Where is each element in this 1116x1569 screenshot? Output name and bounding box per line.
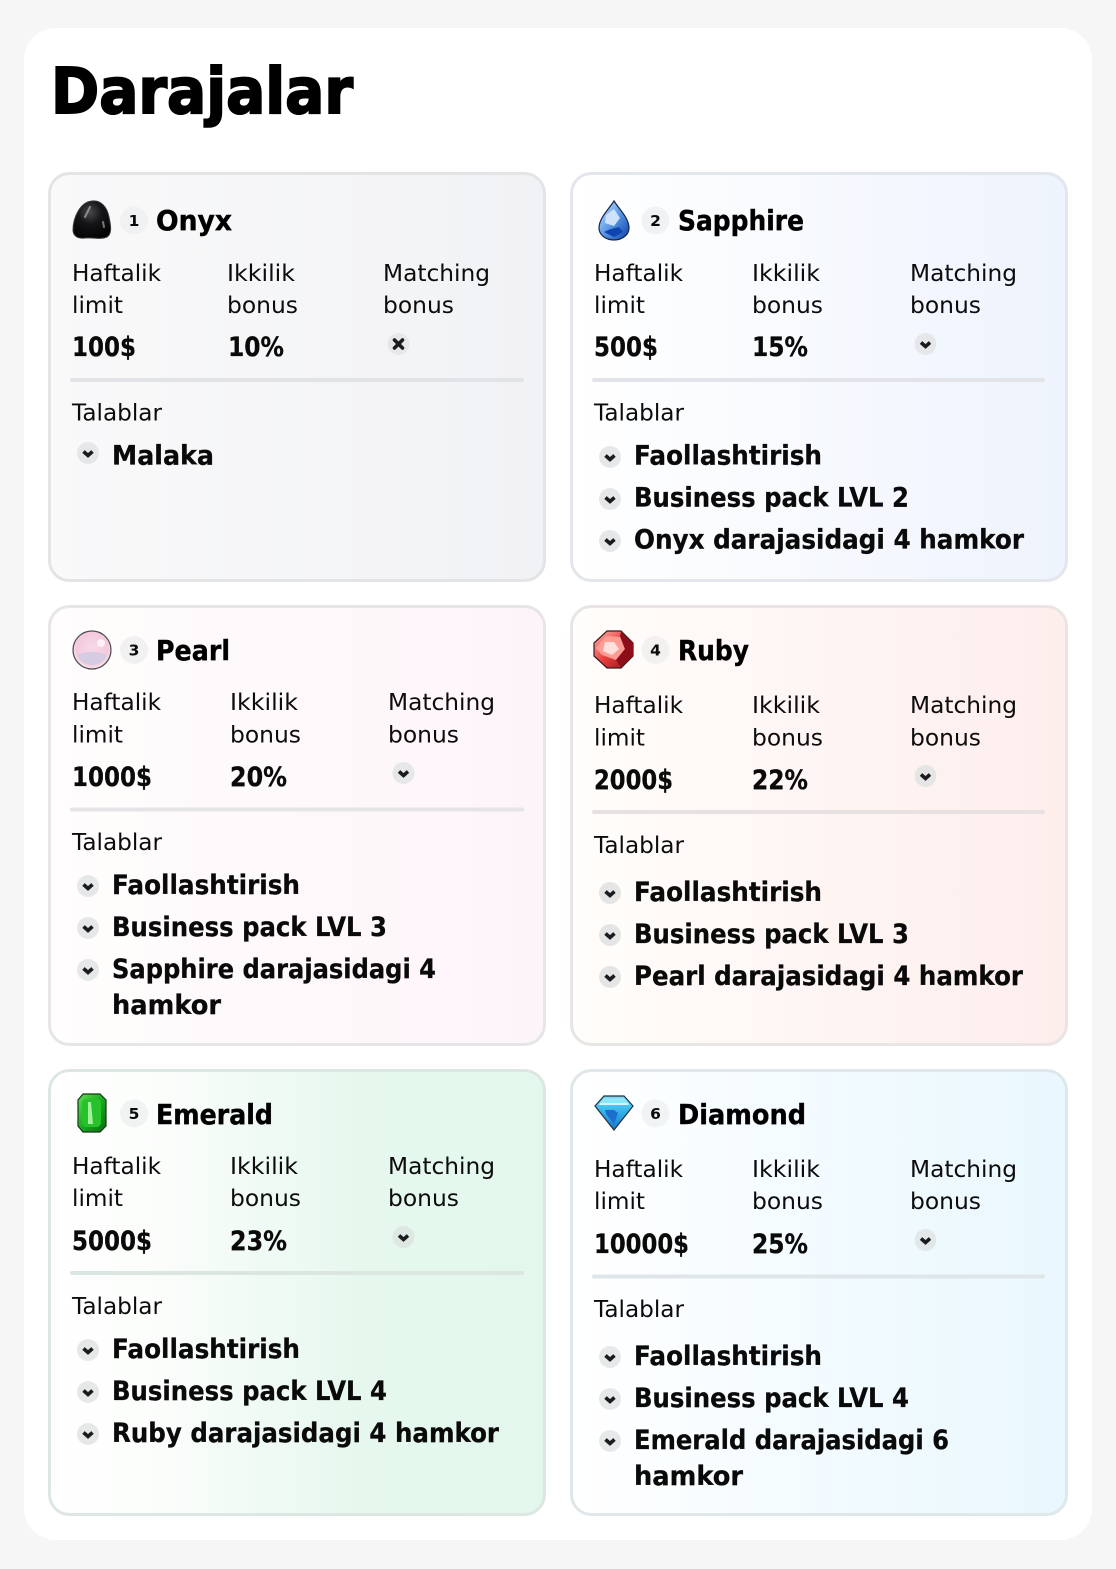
stat: binary bonus (227, 259, 298, 363)
stat: weekly limit: Haftalik (72, 259, 161, 287)
stat: weekly limit: 1000$ (72, 762, 152, 793)
stat: matching bonus: bonus (388, 1184, 459, 1212)
stat: binary bonus (752, 691, 823, 796)
stat: weekly limit (72, 1152, 161, 1257)
stat: binary bonus: Ikkilik (752, 691, 820, 719)
stat: weekly limit: 5000$ (72, 1226, 152, 1257)
requirements: Faollashtirish (634, 877, 822, 908)
icon: onyx gem (73, 201, 111, 238)
stat: binary bonus: 20% (230, 762, 287, 793)
requirements (593, 1295, 949, 1492)
panel: Diamond (572, 1070, 1066, 1514)
rank badge 4: 4 (650, 642, 661, 660)
requirements: Business pack LVL 4 (634, 1383, 909, 1414)
stat: matching bonus (388, 1152, 495, 1248)
stat: matching bonus: bonus (388, 720, 459, 748)
rank badge 2 (642, 206, 670, 234)
rank badge 1 (120, 206, 148, 234)
stat: binary bonus: 10% (228, 332, 284, 363)
stat: matching bonus: bonus (910, 1187, 981, 1215)
rank badge 6: 6 (650, 1105, 661, 1123)
stat: matching bonus: Matching (388, 1152, 495, 1180)
stat: weekly limit: 2000$ (594, 765, 673, 796)
requirements: Business pack LVL 4 (112, 1376, 387, 1407)
stat: matching bonus: Matching (910, 259, 1017, 287)
requirements: Talablar (593, 398, 684, 426)
stat: weekly limit (72, 688, 161, 793)
rank badge 5 (120, 1100, 148, 1128)
name: Emerald: Emerald (156, 1099, 273, 1131)
panel: Onyx (50, 174, 544, 580)
name: Diamond: Diamond (678, 1099, 806, 1131)
stat: matching bonus: Matching (910, 691, 1017, 719)
requirements (71, 398, 214, 472)
requirements: Emerald darajasidagi 6 (634, 1425, 949, 1456)
stat: weekly limit (594, 691, 683, 796)
icon: pearl gem (73, 631, 111, 669)
requirements: hamkor (112, 990, 222, 1021)
stat: weekly limit: Haftalik (72, 688, 161, 716)
requirements: Talablar (71, 828, 162, 856)
stat: weekly limit: limit (72, 720, 123, 748)
requirements: Onyx darajasidagi 4 hamkor (634, 524, 1025, 556)
stat: binary bonus: bonus (230, 720, 301, 748)
requirements: Business pack LVL 3 (112, 912, 387, 943)
stat: binary bonus: bonus (227, 291, 298, 319)
stat: binary bonus: 23% (230, 1226, 287, 1257)
stat: matching bonus: Matching (388, 688, 495, 716)
stat: binary bonus: Ikkilik (230, 1152, 298, 1180)
stat: binary bonus: Ikkilik (230, 688, 298, 716)
stat: matching bonus (910, 691, 1017, 787)
requirements: Faollashtirish (634, 440, 822, 472)
stat: weekly limit: 500$ (594, 332, 658, 363)
stat: binary bonus: bonus (752, 724, 823, 752)
stat: matching bonus: bonus (910, 291, 981, 319)
stat: binary bonus: Ikkilik (752, 1155, 820, 1183)
requirements: Faollashtirish (634, 1341, 822, 1372)
requirements: hamkor (634, 1461, 744, 1492)
requirements: Pearl darajasidagi 4 hamkor (634, 961, 1024, 992)
stat: weekly limit: limit (594, 724, 645, 752)
stat: binary bonus (752, 1155, 823, 1260)
rank badge 3 (120, 636, 148, 664)
stat: weekly limit: limit (594, 291, 645, 319)
stat: matching bonus (388, 688, 495, 784)
requirements: Talablar (71, 1292, 162, 1320)
stat: weekly limit: 10000$ (594, 1229, 689, 1260)
stat: matching bonus: Matching (383, 259, 490, 287)
panel: Pearl (50, 606, 544, 1044)
rank badge 6 (642, 1100, 670, 1128)
requirements: Ruby darajasidagi 4 hamkor (112, 1418, 500, 1449)
stat: weekly limit: Haftalik (72, 1152, 161, 1180)
stat: binary bonus: bonus (752, 1187, 823, 1215)
stat: matching bonus: bonus (383, 291, 454, 319)
stat: matching bonus: bonus (910, 724, 981, 752)
name: Onyx: Onyx (156, 205, 232, 237)
requirements: Business pack LVL 3 (634, 919, 909, 950)
requirements: Faollashtirish (112, 870, 300, 901)
icon: ruby gem (594, 631, 633, 668)
stat: matching bonus (910, 1155, 1017, 1251)
name: Pearl: Pearl (156, 635, 230, 667)
stat: weekly limit: Haftalik (594, 1155, 683, 1183)
requirements: Talablar (71, 398, 162, 426)
panel: Ruby (572, 606, 1066, 1044)
stat: weekly limit: Haftalik (594, 691, 683, 719)
stat: binary bonus: 15% (752, 332, 808, 363)
stat: weekly limit (72, 259, 161, 363)
rank badge 1: 1 (129, 212, 139, 230)
requirements (71, 828, 436, 1021)
stat: binary bonus: Ikkilik (752, 259, 820, 287)
stat: weekly limit (594, 259, 683, 363)
stat: binary bonus (752, 259, 823, 363)
stat: weekly limit: limit (72, 291, 123, 319)
requirements (593, 398, 1025, 556)
requirements: Business pack LVL 2 (634, 482, 909, 514)
requirements (593, 831, 1024, 992)
name: Ruby: Ruby (678, 635, 749, 667)
requirements: Talablar (593, 831, 684, 859)
stat: matching bonus (383, 259, 490, 355)
requirements (71, 1292, 500, 1449)
panel: Sapphire (572, 174, 1066, 580)
rank badge 3: 3 (129, 642, 139, 660)
stat: binary bonus (230, 1152, 301, 1257)
panel: Emerald (50, 1070, 544, 1514)
stat: binary bonus: 22% (752, 765, 808, 796)
requirements: Sapphire darajasidagi 4 (112, 954, 436, 985)
requirements: Talablar (593, 1295, 684, 1323)
stat: weekly limit: Haftalik (594, 259, 683, 287)
stat: binary bonus (230, 688, 301, 793)
rank badge 4 (642, 636, 670, 664)
name: Sapphire: Sapphire (678, 205, 804, 237)
stat: binary bonus: bonus (230, 1184, 301, 1212)
icon: diamond gem (595, 1096, 633, 1130)
stat: weekly limit: limit (594, 1187, 645, 1215)
icon: emerald gem (78, 1094, 106, 1132)
stat: weekly limit (594, 1155, 689, 1260)
stat: matching bonus (910, 259, 1017, 355)
rank badge 5: 5 (129, 1105, 139, 1123)
stat: binary bonus: Ikkilik (227, 259, 295, 287)
stat: binary bonus: bonus (752, 291, 823, 319)
stat: matching bonus: Matching (910, 1155, 1017, 1183)
stat: weekly limit: 100$ (72, 332, 136, 363)
icon: sapphire gem (599, 201, 629, 240)
requirements: Malaka (112, 440, 214, 472)
title: Darajalar (51, 55, 353, 128)
rank badge 2: 2 (650, 212, 661, 230)
requirements: Faollashtirish (112, 1334, 300, 1365)
stat: binary bonus: 25% (752, 1229, 808, 1260)
stat: weekly limit: limit (72, 1184, 123, 1212)
